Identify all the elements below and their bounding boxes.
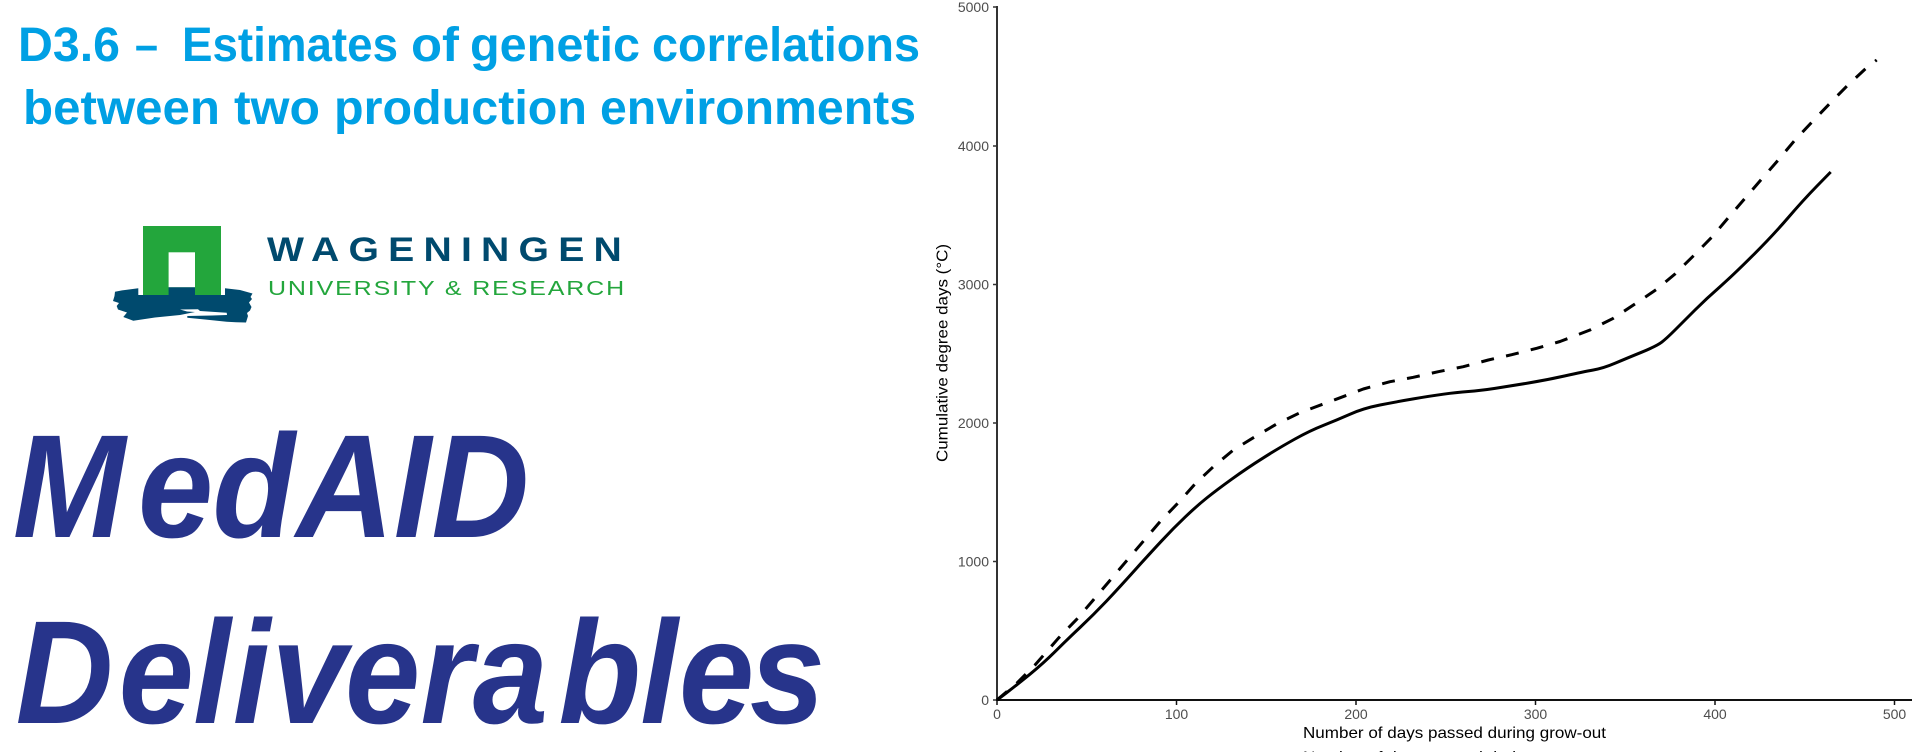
x tick labels: 100 — [1165, 706, 1188, 722]
title: genetic — [470, 19, 640, 72]
title: two — [234, 82, 320, 135]
logo subtitle: UNIVERSITY & RESEARCH — [268, 278, 626, 300]
x tick labels — [993, 706, 1906, 722]
x tick labels: 0 — [993, 706, 1001, 722]
title — [18, 19, 920, 135]
title: production — [334, 82, 587, 135]
title: environments — [600, 82, 916, 135]
title: Estimates — [182, 19, 398, 72]
logo wordmark: WAGENINGEN — [267, 231, 631, 269]
x tick labels: 500 — [1883, 706, 1906, 722]
logo icon: green gate on water — [113, 226, 252, 322]
x tick labels: 300 — [1524, 706, 1547, 722]
y axis title: Cumulative degree days (°C) — [934, 244, 952, 462]
heading: MedAID Deliverables: MedAID — [13, 404, 529, 568]
line: solid series — [997, 172, 1831, 700]
logo: Wageningen University & Research — [113, 226, 631, 322]
title: between — [23, 82, 220, 135]
line: dashed series — [997, 60, 1877, 700]
y tick labels: 2000 — [958, 415, 989, 431]
x axis with ticks — [996, 700, 1912, 705]
title: – — [135, 19, 158, 72]
y tick labels — [958, 0, 989, 708]
chart: cumulative degree days vs days of grow-out — [934, 0, 1912, 752]
y axis with ticks — [993, 6, 997, 701]
x axis title: Number of days passed during grow-out — [1303, 725, 1607, 742]
heading: MedAID Deliverables: Deliverables — [16, 590, 825, 752]
y tick labels: 4000 — [958, 138, 989, 154]
x tick labels: 400 — [1703, 706, 1727, 722]
y tick labels: 0 — [981, 692, 989, 708]
title: correlations — [652, 19, 920, 72]
title: of — [411, 19, 460, 72]
heading: MedAID Deliverables — [13, 404, 825, 752]
x tick labels: 200 — [1344, 706, 1368, 722]
y tick labels: 3000 — [958, 276, 989, 292]
y tick labels: 1000 — [958, 554, 989, 570]
title: D3.6 — [18, 19, 120, 72]
